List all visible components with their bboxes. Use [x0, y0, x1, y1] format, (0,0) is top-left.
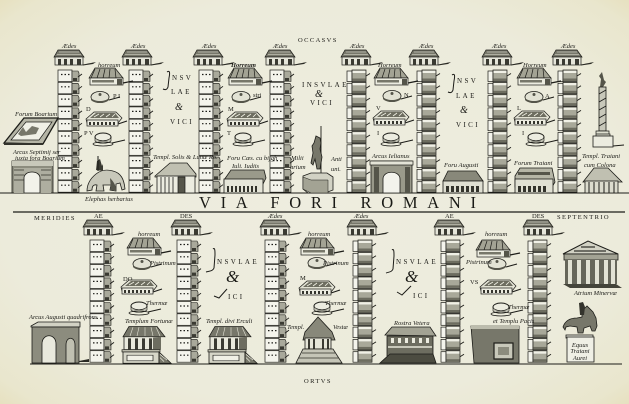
landmark label: Antiani: uni. — [331, 166, 341, 173]
landmark: Miliarium label: arium — [290, 164, 306, 171]
block 3: horrea, pistrinum, domus, puteus: N — [404, 92, 409, 99]
landmark: Forum Caesaris: Iuli. Iudiis — [231, 163, 260, 170]
landmark: Temple of Trajan: Templ. Traiani — [582, 153, 620, 160]
landmark: Templum divi Erculis: Templ. divi Erculi — [206, 318, 252, 325]
landmark: Temple of Vesta: Vestæ — [333, 324, 348, 331]
block 5: horrea, pistrinum, domus, thermae: Pistrinum — [149, 260, 176, 267]
block 3: horrea, pistrinum, domus, puteus: V — [376, 105, 381, 112]
lower row houses with labels: AE — [94, 213, 103, 220]
block 2: horrea, pistrinum, domus, puteus: T — [227, 130, 231, 137]
top row houses with labels: Ædes — [272, 43, 288, 50]
landmark label: Antiani — [330, 156, 342, 173]
block 4: horrea, pistrinum, domus, puteus: L — [517, 105, 521, 112]
landmark: Rostra: Rostra Vetera — [393, 320, 430, 327]
landmark: Miliarium label: Milii — [290, 155, 304, 162]
landmark: Arcus Ielianus — [370, 153, 413, 193]
inscription: Insulae et Vici 4 — [206, 248, 259, 301]
road lines — [0, 193, 629, 364]
block 2: horrea, pistrinum, domus, puteus: M — [228, 106, 234, 113]
inscription: Insulae et Vici 2: VICI — [310, 99, 334, 107]
landmark: Forum Caesaris: Foru Cæs. cu bijgh — [226, 155, 277, 162]
block 6: horrea, pistrinum, domus, thermae: M — [300, 275, 306, 282]
landmark: Templum Pacis — [471, 318, 535, 363]
lower row towers — [90, 240, 551, 362]
block 5: horrea, pistrinum, domus, thermae: DO — [123, 276, 133, 283]
block 7: horrea, pistrinum, domus, thermae: horreum — [485, 231, 507, 238]
landmark: Arcus Septimii: Arcus Septimij ser — [12, 149, 61, 156]
top row houses with labels — [54, 43, 594, 66]
block 5: horrea, pistrinum, domus, thermae: Thermæ — [146, 300, 168, 307]
block 7: horrea, pistrinum, domus, thermae: VS — [470, 279, 479, 286]
block 2: horrea, pistrinum, domus, puteus: Horreum — [230, 62, 256, 69]
lower row houses with labels: Ædes — [267, 213, 283, 220]
block 5: horrea, pistrinum, domus, thermae: horreum — [138, 231, 160, 238]
inscription: Insulae et Vici 4: NSVLAE — [217, 258, 259, 266]
block 4: horrea, pistrinum, domus, puteus — [514, 62, 561, 146]
landmark: Templum Fortunae — [122, 318, 173, 363]
landmark: Forum Boarium — [4, 111, 58, 145]
inscription: Insulae et Vici 5: & — [405, 267, 419, 286]
landmark: Elephas herbarius — [84, 156, 133, 203]
lower row houses with labels: DES — [180, 213, 193, 220]
landmark: Miliarium label — [290, 155, 306, 171]
landmark label: Antiani: Anti — [330, 156, 342, 163]
landmark: Equus Traiani statue: Traiani — [570, 348, 590, 355]
headings: meridies and septentrio: SEPTENTRIO — [557, 214, 610, 221]
landmark: Arcus Septimii: iuxta fora Boarium — [15, 155, 65, 162]
landmark: Temple of Trajan: cum Colona — [584, 162, 616, 169]
landmark: Forum Boarium: Forum Boarium — [14, 111, 57, 118]
landmark: Forum Caesaris — [224, 155, 277, 193]
inscription: Insulae et Vici 4: ICI — [228, 293, 245, 301]
headings: meridies and septentrio: MERIDIES — [34, 215, 76, 222]
inscription: Insulae et Vici 5: ICI — [413, 292, 430, 300]
landmark: Temple of Sol and Luna: Templ. Solis & Lunæ Ro. — [153, 154, 218, 161]
landmark: Temple of Sol and Luna — [153, 154, 218, 193]
title: Via Fori Romani: VIA FORI ROMANI — [199, 193, 486, 212]
block 3: horrea, pistrinum, domus, puteus — [373, 62, 418, 146]
top row houses with labels: Ædes — [491, 43, 507, 50]
top row houses with labels: Ædes — [61, 43, 77, 50]
landmark: Rostra — [380, 320, 436, 363]
landmark: Forum Augusti — [443, 162, 483, 193]
block 1: horrea, pistrinum, domus, puteus: P I — [113, 93, 120, 100]
block 1: horrea, pistrinum, domus, puteus: D — [86, 106, 91, 113]
top row houses with labels: Ædes — [418, 43, 434, 50]
landmark: Temple of Vesta — [287, 317, 348, 363]
inscription: Insulae et Vici 1: VICI — [170, 118, 194, 126]
landmark: Arcus Augusti — [28, 314, 98, 363]
inscription: Insulae et Vici 2: & — [315, 89, 323, 100]
landmark: Elephas herbarius: Elephas herbarius — [84, 196, 133, 203]
inscription: Insulae et Vici 1: & — [175, 102, 183, 113]
inscription: Insulae et Vici 3: & — [460, 105, 468, 116]
block 6: horrea, pistrinum, domus, thermae — [299, 231, 349, 315]
block 2: horrea, pistrinum, domus, puteus: stri — [253, 92, 262, 99]
inscription: Insulae et Vici 5 — [386, 249, 438, 300]
landmark: Arcus Martis temple — [563, 241, 622, 297]
inscription: Insulae et Vici 4: & — [226, 267, 240, 286]
inscription: Insulae et Vici 3: VICI — [456, 121, 480, 129]
lower row houses with labels: Ædes — [353, 213, 369, 220]
block 6: horrea, pistrinum, domus, thermae: horreum — [308, 231, 330, 238]
top row houses with labels: Ædes — [201, 43, 217, 50]
inscription: Insulae et Vici 3: LAE — [456, 92, 477, 100]
inscription: Insulae et Vici 5: NSVLAE — [396, 258, 438, 266]
inscription: Insulae et Vici 3 — [448, 74, 480, 129]
top row houses with labels: Ædes — [349, 43, 365, 50]
block 7: horrea, pistrinum, domus, thermae: Pistrinum — [465, 259, 492, 266]
lower row houses with labels — [83, 213, 565, 236]
block 3: horrea, pistrinum, domus, puteus: Horreum — [377, 62, 402, 69]
landmark: Equus Traiani statue — [563, 302, 597, 362]
landmark: Columna Traiani — [593, 72, 624, 147]
block 4: horrea, pistrinum, domus, puteus: Horreum — [522, 62, 547, 69]
inscription: Insulae et Vici 2: INSVLAE — [302, 81, 349, 89]
block 6: horrea, pistrinum, domus, thermae: Thermæ — [325, 300, 347, 307]
landmark: Arcus Septimii — [12, 149, 65, 193]
inscription: Insulae et Vici 2 — [302, 81, 349, 107]
block 3: horrea, pistrinum, domus, puteus: I — [377, 130, 379, 137]
landmark: Equus Traiani statue: Aurei — [572, 355, 587, 362]
block 4: horrea, pistrinum, domus, puteus: I — [522, 130, 524, 137]
block 4: horrea, pistrinum, domus, puteus: A — [545, 93, 550, 100]
landmark: Equus Traiani statue: Equus — [571, 342, 589, 349]
block 7: horrea, pistrinum, domus, thermae — [465, 231, 530, 316]
block 6: horrea, pistrinum, domus, thermae: Pistrinum — [322, 260, 349, 267]
inscription: Insulae et Vici 3: NSV — [457, 77, 478, 85]
block 2: horrea, pistrinum, domus, puteus — [227, 62, 272, 146]
block 1: horrea, pistrinum, domus, puteus — [84, 62, 133, 146]
landmark: Forum Traiani: Forum Traiani — [513, 160, 553, 167]
top row houses with labels: Ædes — [560, 43, 576, 50]
lower row houses with labels: DES — [532, 213, 545, 220]
landmark: Templum divi Erculis — [206, 318, 257, 363]
block 1: horrea, pistrinum, domus, puteus: horreum — [98, 62, 120, 69]
landmark: Arcus Ielianus: Arcus Ielianus — [371, 153, 410, 160]
landmark: statue on pedestal — [303, 126, 333, 193]
landmark: Templum Pacis: et Templu Pacis — [493, 318, 535, 325]
block 7: horrea, pistrinum, domus, thermae: Thermæ — [508, 304, 530, 311]
landmark: Arcus Martis temple: Atrium Minervæ — [573, 290, 617, 297]
inscription: Insulae et Vici 1: NSV — [172, 74, 193, 82]
heading: ortus: ORTVS — [304, 378, 332, 385]
block 1: horrea, pistrinum, domus, puteus: P V — [84, 130, 94, 137]
landmark: Templum Fortunae: Templum Fortunæ — [125, 318, 173, 325]
landmark: Forum Augusti: Foru Augusti — [443, 162, 479, 169]
top row houses with labels: Ædes — [130, 43, 146, 50]
landmark: Temple of Trajan — [582, 153, 622, 193]
landmark: Arcus Augusti: Arcus Augusti quadrifrons — [28, 314, 98, 321]
lower row houses with labels: AE — [445, 213, 454, 220]
inscription: Insulae et Vici 1 — [163, 71, 194, 126]
heading: occasus: OCCASVS — [298, 37, 338, 44]
block 5: horrea, pistrinum, domus, thermae — [121, 231, 176, 315]
landmark: Forum Traiani — [513, 160, 555, 193]
headings: meridies and septentrio — [34, 214, 610, 222]
top row towers — [58, 70, 581, 192]
landmark: Temple of Vesta: Templ. — [287, 324, 305, 331]
inscription: Insulae et Vici 1: LAE — [171, 88, 192, 96]
